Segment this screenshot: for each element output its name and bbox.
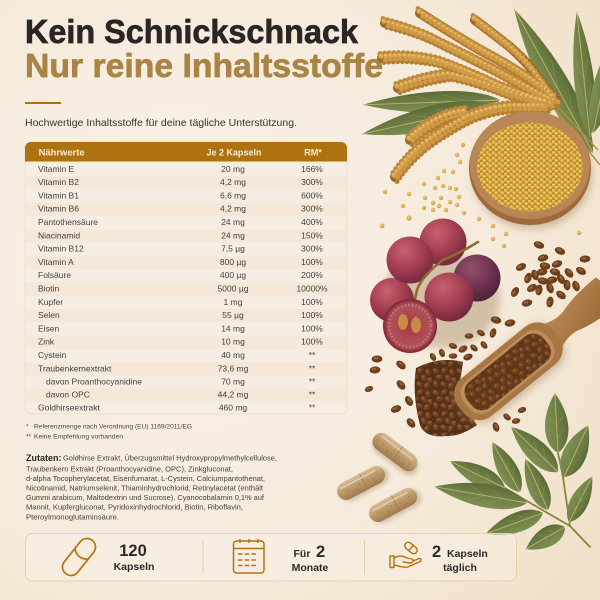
grape: top — [420, 218, 466, 266]
illustration: millet sprays and top leaves — [359, 3, 600, 182]
row: Selen — [26, 309, 346, 322]
illustration: loose grape seeds lower pile — [364, 315, 527, 436]
row: Zink — [26, 336, 346, 349]
row: davon Proanthocyanidine: davon Proanthocyanidine — [46, 376, 142, 386]
row: Goldhirseextrakt: ** — [309, 403, 316, 413]
footnotes: Keine Empfehlung vorhanden — [34, 434, 123, 440]
row: Biotin: 10000% — [296, 284, 328, 294]
row: Pantothensäure — [38, 217, 323, 227]
millet sprays — [380, 8, 600, 182]
row: Vitamin E — [38, 164, 323, 174]
grape: back right — [454, 254, 500, 302]
row: Eisen: Eisen — [38, 323, 60, 333]
row: Vitamin B12 — [38, 244, 323, 254]
footnotes: Referenzmenge nach Verordnung (EU) 1169/2011/EG — [34, 424, 192, 430]
row: Vitamin B6: Vitamin B6 — [38, 204, 79, 214]
row: davon Proanthocyanidine: ** — [309, 376, 316, 386]
row: Eisen: 100% — [301, 323, 323, 333]
row: Vitamin B2: Vitamin B2 — [38, 177, 79, 187]
row: Vitamin B2 — [26, 176, 346, 189]
row: Vitamin B12: Vitamin B12 — [38, 244, 84, 254]
row: Vitamin B12: 300% — [301, 244, 323, 254]
footnotes — [26, 424, 192, 440]
row: Vitamin B1: 6,6 mg — [220, 190, 246, 200]
title — [25, 14, 383, 85]
capsule 1 — [367, 429, 424, 479]
row: Vitamin B1: 600% — [301, 190, 323, 200]
illustration: capsules — [334, 429, 424, 528]
row: Selen: 100% — [301, 310, 323, 320]
title line 1: Kein Schnickschnack — [25, 14, 358, 51]
row: Vitamin E: Vitamin E — [38, 164, 75, 174]
row: Eisen — [38, 323, 323, 333]
footnotes: ** — [26, 434, 31, 440]
grape: upper left — [386, 236, 434, 284]
ingredients text: d-alpha Tocopherylacetat, Eisenfumarat, L-Cystein, Calciumpantothenat, — [26, 474, 265, 483]
row: Pantothensäure: Pantothensäure — [38, 217, 98, 227]
ingredients text: Zutaten: — [26, 453, 62, 463]
stat: 2 Kapseln täglich — [390, 541, 488, 574]
row: Selen: 55 µg — [222, 310, 244, 320]
ingredients text: Nicotinamid, Natriumselenit, Thiaminhydrochlorid, Retinylacetat (enthält — [26, 484, 263, 492]
row: Kupfer — [38, 297, 323, 307]
ingredients text: Goldhirse Extrakt, Überzugsmittel Hydroxypropylmethylcellulose, — [63, 454, 277, 462]
row: Folsäure: Folsäure — [38, 270, 71, 280]
row: davon OPC: davon OPC — [46, 390, 90, 400]
ingredients text: Gummi arabicum, Maltodextrin und Sucrose), Cyanocobalamin 0,1% auf — [26, 493, 265, 502]
row: Selen: Selen — [38, 310, 60, 320]
stats bar — [26, 534, 516, 581]
row: Biotin: 5000 µg — [218, 284, 249, 294]
stat: 120 Kapseln: Kapseln — [114, 561, 154, 573]
row: Traubenkernextrakt: ** — [309, 363, 316, 373]
row: Niacinamid: 150% — [301, 230, 323, 240]
row: Vitamin E: 20 mg — [221, 164, 245, 174]
row: Vitamin B6 — [26, 203, 346, 216]
cut grape — [383, 299, 437, 353]
row: Vitamin E: 166% — [301, 164, 323, 174]
row: Cystein: 40 mg — [221, 350, 245, 360]
illustration: scattered millet grains — [380, 143, 581, 248]
scoop handle — [536, 271, 600, 354]
nutrition table — [25, 142, 347, 414]
row: Biotin: Biotin — [38, 284, 60, 294]
table header: Je 2 Kapseln — [206, 148, 262, 158]
row: Cystein: ** — [309, 350, 316, 360]
capsule 2 — [334, 461, 392, 506]
row: Vitamin B6: 4,2 mg — [220, 204, 246, 214]
row: Vitamin B2: 300% — [301, 177, 323, 187]
row: Niacinamid: Niacinamid — [38, 230, 80, 240]
row: Vitamin A: Vitamin A — [38, 257, 74, 267]
row: Vitamin A: 800 µg — [220, 257, 246, 267]
row: Kupfer: 1 mg — [224, 297, 243, 307]
row: Kupfer: 100% — [301, 297, 323, 307]
row: Goldhirseextrakt: Goldhirseextrakt — [38, 403, 101, 413]
row: davon OPC: 44,2 mg — [218, 390, 249, 400]
stat: Für 2 Monate: Für — [294, 548, 310, 560]
row: davon Proanthocyanidine — [46, 376, 316, 386]
grape stem — [412, 242, 478, 323]
stat: 2 Kapseln täglich: täglich — [443, 562, 477, 574]
row: Biotin — [26, 282, 346, 296]
row: Traubenkernextrakt — [26, 362, 346, 376]
row: davon OPC: ** — [309, 390, 316, 400]
row: Zink: 10 mg — [221, 337, 245, 347]
capsule 3 — [366, 483, 424, 528]
ingredients text — [26, 453, 277, 522]
stat: 120 Kapseln — [59, 535, 154, 579]
row: Folsäure — [38, 270, 323, 280]
table header — [25, 142, 347, 162]
row: Pantothensäure: 24 mg — [221, 217, 245, 227]
row: Folsäure: 400 µg — [220, 270, 246, 280]
row: Vitamin A — [26, 256, 346, 269]
stat: Für 2 Monate: 2 — [316, 543, 325, 561]
title line 2: Nur reine Inhaltsstoffe — [25, 48, 383, 85]
row: Kupfer: Kupfer — [38, 297, 63, 307]
illustration: leaf branch — [432, 392, 600, 558]
row: Vitamin A: 100% — [301, 257, 323, 267]
row: Vitamin B1 — [38, 190, 323, 200]
row: Traubenkernextrakt: Traubenkernextrakt — [38, 363, 112, 373]
icon: calendar — [234, 539, 264, 573]
row: davon OPC — [26, 388, 346, 402]
row: Eisen: 14 mg — [221, 323, 245, 333]
row: davon Proanthocyanidine: 70 mg — [221, 376, 245, 386]
row: Cystein — [38, 350, 316, 360]
stat: 2 Kapseln täglich: Kapseln — [447, 548, 488, 560]
illustration: loose grape seeds upper cluster — [509, 240, 591, 308]
ingredients text: Mannit, Kupfergluconat, Pyridoxinhydrochlorid, Biotin, Riboflavin, — [26, 502, 243, 512]
stat: Für 2 Monate: Monate — [292, 562, 329, 574]
row: Vitamin B1: Vitamin B1 — [38, 190, 79, 200]
row: Goldhirseextrakt — [38, 403, 316, 413]
row: Pantothensäure: 400% — [301, 217, 323, 227]
icon: hand with capsule — [390, 541, 421, 568]
row: Zink: Zink — [38, 337, 55, 347]
row: Goldhirseextrakt: 460 mg — [219, 403, 247, 413]
ingredients text: Traubenkern Extrakt (Proanthocyanidine, OPC), Zinkgluconat, — [26, 464, 233, 474]
stat: 120 Kapseln: 120 — [119, 542, 147, 560]
icon: capsule — [59, 535, 99, 579]
illustration: grapes — [370, 218, 500, 353]
illustration: wooden scoop — [446, 266, 600, 431]
footnotes: * — [26, 424, 29, 430]
ingredients text: Pteroylmonoglutaminsäure. — [26, 512, 119, 522]
row: Vitamin B12: 7,5 µg — [221, 244, 245, 254]
row: Zink: 100% — [301, 337, 323, 347]
row: Folsäure: 200% — [301, 270, 323, 280]
row: Traubenkernextrakt: 73,6 mg — [218, 363, 249, 373]
table header: RM* — [304, 148, 322, 158]
row: Cystein: Cystein — [38, 350, 67, 360]
subtitle: Hochwertige Inhaltsstoffe für deine tägliche Unterstützung. — [25, 117, 297, 129]
stat: 2 Kapseln täglich: 2 — [432, 543, 441, 561]
row: Niacinamid — [26, 229, 346, 242]
illustration: bowl of millet — [469, 111, 592, 229]
row: Vitamin B6: 300% — [301, 204, 323, 214]
grape: left — [370, 278, 414, 322]
grape: centre — [424, 272, 474, 322]
row: Niacinamid: 24 mg — [221, 230, 245, 240]
leaves behind millet — [359, 3, 600, 159]
stat: Für 2 Monate — [234, 539, 329, 574]
table header: Nährwerte — [39, 148, 85, 158]
row: Vitamin B2: 4,2 mg — [220, 177, 246, 187]
